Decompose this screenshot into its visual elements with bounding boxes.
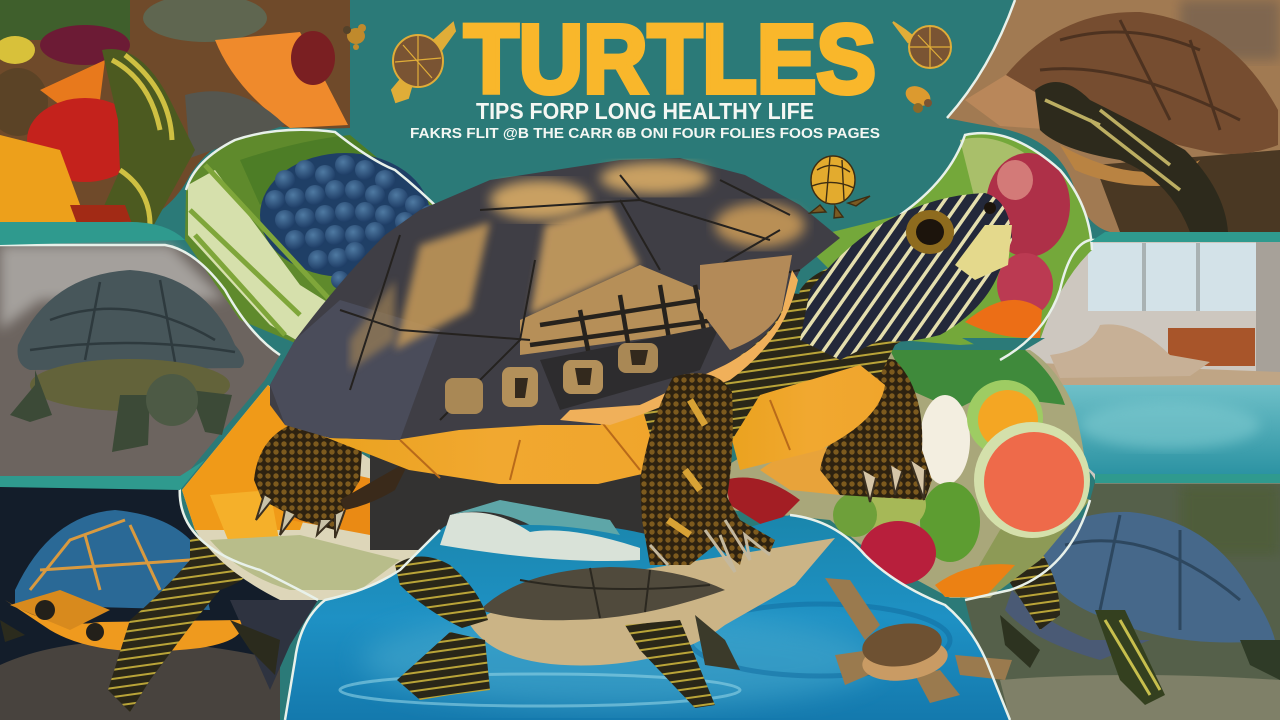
front leg <box>640 373 775 565</box>
claws left <box>256 495 345 538</box>
body stripes <box>590 290 895 475</box>
panel: right room with pool <box>1000 240 1280 480</box>
panel: bottom-left blue turtle on rock <box>0 485 318 720</box>
plastron <box>325 400 660 484</box>
panel: left turtle on gray stone <box>0 245 280 476</box>
head <box>800 193 1012 360</box>
icon: small turtle top left <box>343 24 366 50</box>
title: TURTLES: TURTLES <box>464 4 876 114</box>
panel: citrus and fruit <box>720 350 1090 598</box>
icon: yellow turtle near center <box>810 156 870 218</box>
panel: orange peppers and squash <box>182 385 465 600</box>
panel: blue water with swimming turtles <box>285 500 1012 720</box>
panel: leaf and red fruit <box>800 133 1092 350</box>
subtitle: TIPS FORP LONG HEALTHY LIFE <box>476 98 814 124</box>
shell <box>270 158 840 440</box>
central turtle <box>254 158 1012 572</box>
panel: bottom-right blue turtle on moss <box>965 482 1280 720</box>
dark shadow under turtle <box>370 440 670 550</box>
shell rim highlight <box>560 270 798 425</box>
icon: brown turtle left of title <box>392 23 455 102</box>
neck and throat stripes <box>790 260 920 350</box>
swimming striped turtle <box>395 538 835 708</box>
small brown turtle <box>825 578 1012 703</box>
back leg right <box>820 359 932 500</box>
icon: brown turtle right of title <box>893 22 951 68</box>
panel: top-left food photo <box>0 0 350 232</box>
panel: top-right turtle on soil <box>947 0 1280 232</box>
back leg left <box>254 425 362 530</box>
caption line: FAKRS FLIT @B THE CARR 6B ONI FOUR FOLIES FOOS PAGES <box>410 126 880 142</box>
icon: small turtle right <box>902 82 934 113</box>
teal band strips beside panels <box>0 222 1280 490</box>
panel: green onions and blueberries <box>185 130 445 345</box>
